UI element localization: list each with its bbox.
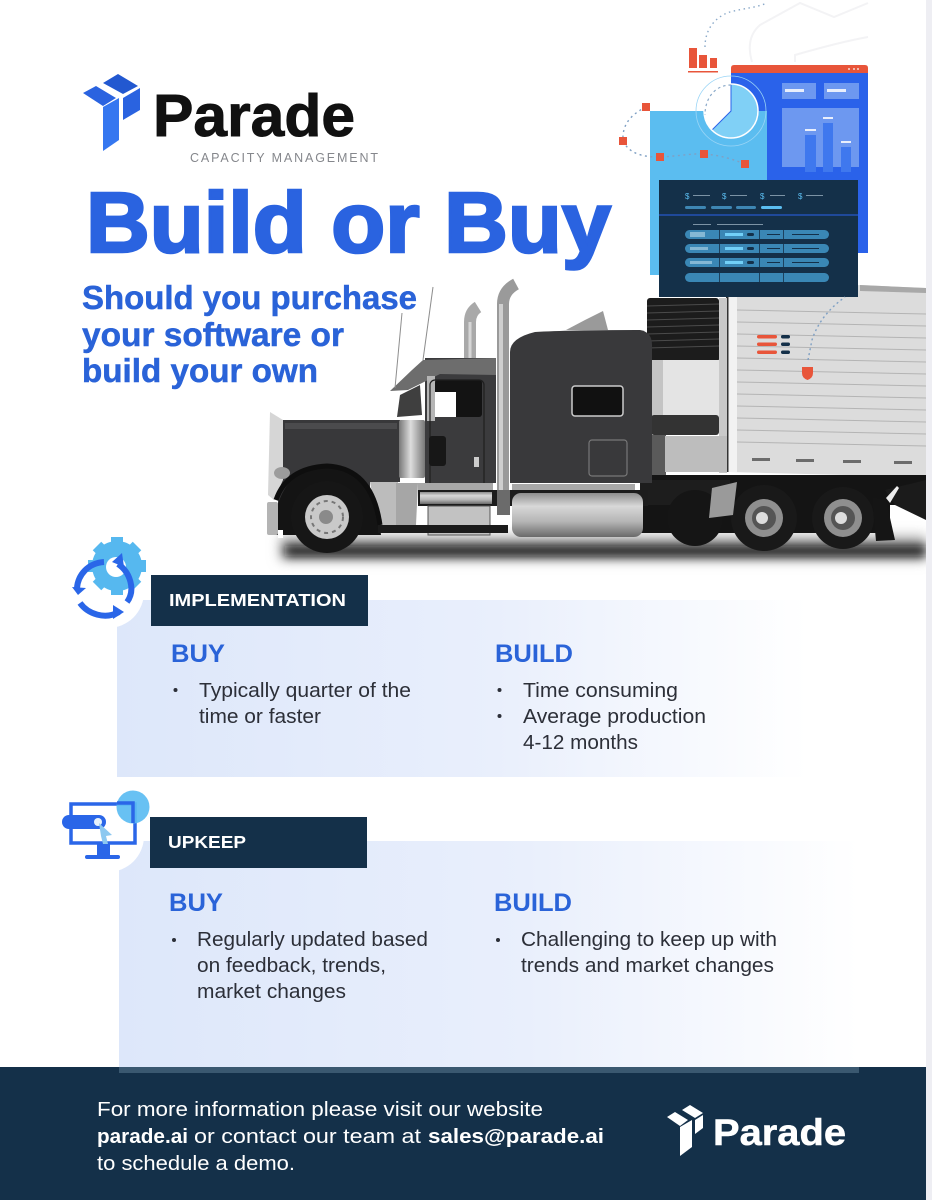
icon: monitor with cursor	[62, 790, 150, 859]
ground shadow	[280, 536, 926, 560]
dashboard graphic	[619, 3, 868, 380]
logo: Parade capacity management	[83, 74, 378, 165]
trailer body	[726, 285, 926, 477]
reefer unit	[647, 298, 727, 475]
footer text: parade.ai	[97, 1125, 188, 1148]
cab	[390, 358, 496, 495]
dark data table panel: $	[722, 192, 727, 201]
column: buy	[169, 889, 428, 1003]
chassis	[640, 475, 926, 505]
page edge strip	[926, 0, 932, 1200]
column: build: BUILD	[495, 640, 573, 668]
front wheel	[291, 481, 363, 553]
column: build: trends and market changes	[521, 954, 774, 977]
dark data table panel: $	[685, 192, 690, 201]
logo wordmark: Parade	[153, 83, 355, 149]
column: buy: BUY	[169, 889, 223, 917]
column: build: Challenging to keep up with	[521, 928, 777, 951]
footer logo: Parade	[713, 1112, 846, 1153]
section tag	[151, 575, 368, 626]
icon: small bar chart	[688, 48, 718, 72]
footer text: sales@parade.ai	[428, 1125, 604, 1148]
fuel tank	[512, 493, 643, 537]
section tag: IMPLEMENTATION	[169, 590, 346, 610]
column: build: 4-12 months	[523, 731, 638, 754]
column: build: Average production	[523, 705, 706, 728]
sleeper window	[572, 386, 623, 416]
footer text: For more information please visit our website	[97, 1098, 543, 1121]
light blue panel	[650, 111, 767, 275]
column: build	[495, 640, 706, 754]
trailer wheels	[667, 482, 895, 551]
subtitle: build your own	[82, 352, 318, 389]
column: buy	[171, 640, 411, 728]
footer logo	[667, 1105, 846, 1156]
tool box	[428, 506, 490, 535]
dark data table panel: $	[798, 192, 803, 201]
column: build	[494, 889, 777, 977]
footer text	[97, 1098, 604, 1175]
exhaust lower	[497, 490, 510, 515]
footer text: to schedule a demo.	[97, 1152, 295, 1175]
icon: Parade logo mark	[83, 74, 140, 151]
footer text: or contact our team at	[194, 1125, 421, 1148]
icon: gear with rotating arrows	[72, 537, 146, 619]
subtitle	[82, 279, 417, 389]
panel: implementation	[72, 537, 807, 777]
dark data table panel: $	[760, 192, 765, 201]
column: buy: on feedback, trends,	[197, 954, 386, 977]
column: buy: BUY	[171, 640, 225, 668]
sleeper door	[589, 440, 627, 476]
column: build: Time consuming	[523, 679, 678, 702]
footer	[0, 1067, 926, 1200]
column: buy: market changes	[197, 980, 346, 1003]
subtitle: your software or	[82, 316, 344, 353]
blue window panel	[731, 65, 868, 253]
logo tagline: CAPACITY MANAGEMENT	[190, 151, 378, 165]
section tag	[150, 817, 367, 868]
subtitle: Should you purchase	[82, 279, 417, 316]
antennas	[395, 287, 433, 388]
section tag: UPKEEP	[168, 832, 246, 852]
column: buy: Regularly updated based	[197, 928, 428, 951]
dark data table panel	[659, 180, 858, 297]
sleeper cab	[510, 311, 652, 483]
hood	[267, 412, 418, 538]
pie chart	[696, 76, 766, 146]
trailer route and icons	[757, 297, 845, 380]
column: buy: Typically quarter of the	[199, 679, 411, 702]
dotted route with nodes	[619, 103, 749, 168]
air cleaner	[399, 420, 425, 478]
title: Build or Buy	[86, 176, 611, 271]
dotted route top	[705, 3, 767, 47]
faint map lines	[750, 3, 868, 62]
exhaust stacks	[470, 284, 516, 510]
panel: upkeep	[62, 790, 859, 1067]
truck illustration	[267, 284, 926, 560]
column: build: BUILD	[494, 889, 572, 917]
column: buy: time or faster	[199, 705, 321, 728]
chrome rails	[418, 483, 635, 491]
